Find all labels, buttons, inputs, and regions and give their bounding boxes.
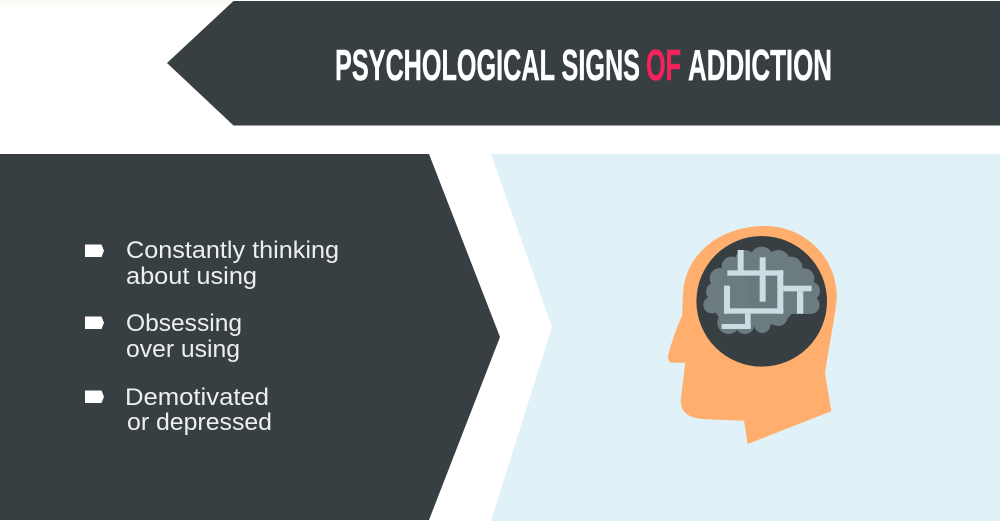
item text	[126, 237, 339, 290]
item text: Constantly thinking	[126, 237, 339, 264]
maze lines	[722, 250, 812, 329]
bullet icon	[85, 244, 104, 257]
item text	[125, 384, 272, 436]
item text: or depressed	[127, 409, 272, 436]
dark circle	[696, 236, 827, 367]
brain lobes	[703, 247, 820, 334]
item text: Obsessing	[126, 310, 242, 337]
bullet icon	[85, 390, 104, 403]
panel: illustration	[491, 154, 1000, 521]
list item: obsessing	[85, 310, 242, 363]
icon: head with maze brain	[668, 226, 837, 444]
title banner	[167, 1, 1000, 126]
list item: demotivated	[85, 384, 272, 436]
dark arrow panel	[0, 154, 500, 520]
banner arrow shape	[167, 1, 1000, 126]
panel: signs list	[0, 154, 500, 520]
item text: Demotivated	[125, 384, 269, 411]
list item: constantly thinking	[85, 237, 339, 290]
item text: about using	[126, 263, 257, 290]
inner shaded cell	[750, 276, 778, 308]
title text: OF	[646, 42, 681, 90]
head silhouette	[668, 226, 837, 444]
item text: over using	[126, 336, 240, 363]
title text: ADDICTION	[688, 42, 832, 90]
bullet icon	[85, 316, 104, 329]
item text	[126, 310, 242, 363]
title text: PSYCHOLOGICAL SIGNS	[335, 42, 640, 90]
light blue arrow panel	[491, 154, 1000, 521]
brain	[703, 247, 820, 334]
